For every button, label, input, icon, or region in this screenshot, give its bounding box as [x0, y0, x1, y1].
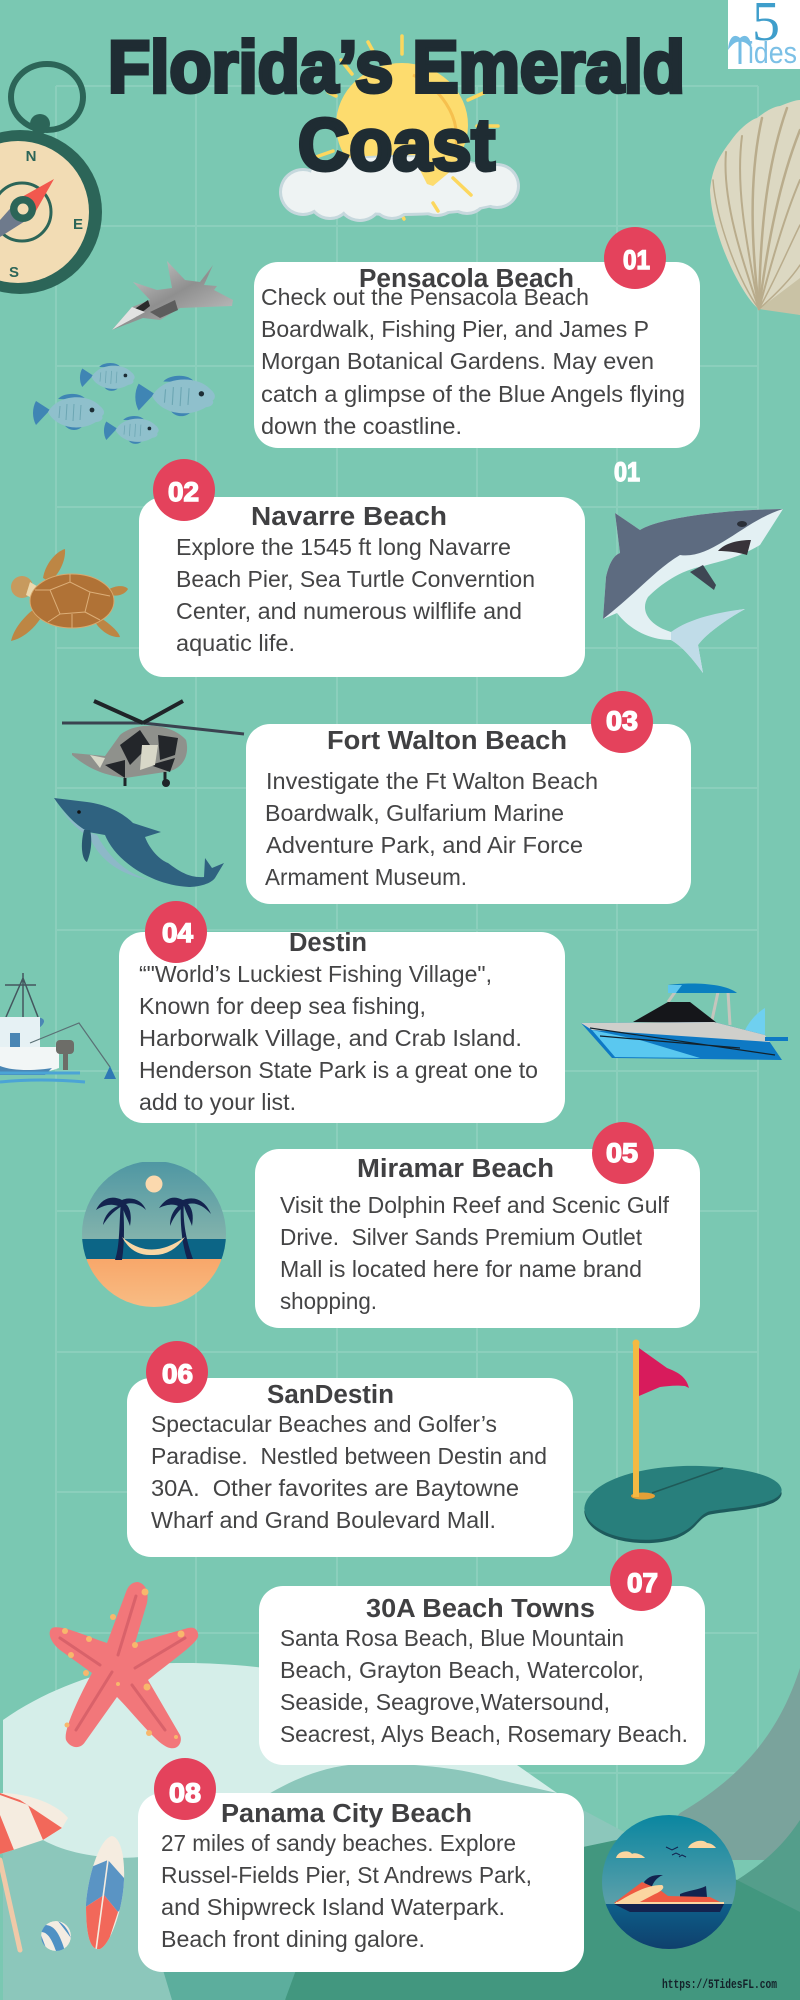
text block: 27 miles of sandy beaches. Explore	[161, 1830, 516, 1856]
badge 08	[154, 1758, 216, 1820]
icon: surfboard	[86, 1836, 124, 1950]
text block: Paradise. Nestled between Destin and	[151, 1443, 547, 1469]
heading: Pensacola Beach	[359, 265, 574, 293]
icon: beach ball	[41, 1921, 71, 1951]
text block: Beach Pier, Sea Turtle Converntion	[176, 566, 535, 592]
panel: Pensacola Beach	[254, 227, 700, 448]
text block: and Shipwreck Island Waterpark.	[161, 1894, 505, 1920]
background grid	[56, 86, 758, 1840]
icon: sea turtle	[11, 549, 128, 641]
text block	[161, 1830, 532, 1952]
text block: aquatic life.	[176, 630, 295, 656]
text block	[261, 284, 685, 439]
badge 04	[145, 901, 207, 963]
badge 03: 03	[606, 706, 638, 736]
title: Florida’s Emerald	[108, 27, 685, 108]
compass icon: E	[73, 216, 83, 233]
compass icon	[0, 64, 102, 294]
heading: Panama City Beach	[221, 1800, 472, 1828]
stray number: 01	[614, 457, 640, 487]
badge 08: 08	[169, 1778, 201, 1808]
badge 05: 05	[606, 1138, 638, 1168]
text block: Beach, Grayton Beach, Watercolor,	[280, 1657, 644, 1683]
text block: Harborwalk Village, and Crab Island.	[139, 1025, 522, 1051]
panel: Fort Walton Beach	[246, 691, 691, 904]
icon: shark	[603, 509, 783, 673]
badge 04: 04	[162, 918, 193, 948]
text block: Seacrest, Alys Beach, Rosemary Beach.	[280, 1721, 688, 1747]
icon: helicopter	[62, 701, 244, 787]
title: Coast	[298, 105, 495, 186]
text block: Center, and numerous wilflife and	[176, 598, 522, 624]
text block: Santa Rosa Beach, Blue Mountain	[280, 1625, 624, 1651]
text block	[265, 768, 598, 890]
panel: Navarre Beach	[139, 459, 585, 677]
icon: golf flag and green	[584, 1340, 782, 1543]
compass icon: S	[9, 264, 19, 281]
heading: SanDestin	[267, 1381, 394, 1409]
text block: add to your list.	[139, 1089, 296, 1115]
text block: Boardwalk, Fishing Pier, and James P	[261, 316, 649, 342]
badge 05	[592, 1122, 654, 1184]
heading: Navarre Beach	[251, 503, 447, 531]
icon: speedboat	[581, 984, 788, 1060]
text block: Seaside, Seagrove,Watersound,	[280, 1689, 610, 1715]
icon: beach umbrella	[0, 1790, 70, 1950]
text block: “"World’s Luckiest Fishing Village",	[139, 961, 492, 987]
text block: Boardwalk, Gulfarium Marine	[265, 800, 564, 826]
text block: Spectacular Beaches and Golfer’s	[151, 1411, 497, 1437]
text block	[151, 1411, 547, 1533]
text block: Mall is located here for name brand	[280, 1256, 642, 1282]
text block	[280, 1192, 670, 1314]
text block: Visit the Dolphin Reef and Scenic Gulf	[280, 1192, 670, 1218]
panel: Destin	[119, 901, 565, 1123]
text block	[139, 961, 538, 1115]
text block: Beach front dining galore.	[161, 1926, 425, 1952]
text block: Check out the Pensacola Beach	[261, 284, 589, 310]
icon: starfish	[50, 1582, 198, 1748]
icon: sun	[313, 36, 498, 219]
heading: Destin	[289, 929, 367, 957]
icon: seashell	[710, 100, 800, 315]
badge 03	[591, 691, 653, 753]
panel: Miramar Beach	[255, 1122, 700, 1328]
text block: Armament Museum.	[265, 864, 467, 890]
icon: fighter jet	[112, 261, 233, 330]
heading: Fort Walton Beach	[327, 727, 567, 755]
text block: 30A. Other favorites are Baytowne	[151, 1475, 519, 1501]
text block: Morgan Botanical Gardens. May even	[261, 348, 654, 374]
icon: palm tree beach scene	[82, 1162, 226, 1309]
badge 07	[610, 1549, 672, 1611]
bottom landscape shapes	[3, 1663, 800, 2000]
text block: Explore the 1545 ft long Navarre	[176, 534, 511, 560]
badge 01	[604, 227, 666, 289]
badge 02	[153, 459, 215, 521]
icon: fishing boat	[0, 973, 116, 1082]
title	[108, 27, 685, 186]
text block	[176, 534, 535, 656]
panel: Panama City Beach	[138, 1758, 584, 1972]
text block: Investigate the Ft Walton Beach	[266, 768, 598, 794]
text block: Known for deep sea fishing,	[139, 993, 426, 1019]
panel: 30A Beach Towns	[259, 1549, 705, 1765]
text block: shopping.	[280, 1288, 377, 1314]
text block	[280, 1625, 688, 1747]
icon: dolphin	[54, 798, 224, 887]
badge 06: 06	[162, 1359, 193, 1389]
icon: cloud	[279, 150, 520, 222]
panel: SanDestin	[127, 1341, 573, 1557]
heading: 30A Beach Towns	[366, 1595, 595, 1623]
text block: Wharf and Grand Boulevard Mall.	[151, 1507, 496, 1533]
badge 07: 07	[627, 1568, 658, 1598]
text block: down the coastline.	[261, 413, 462, 439]
logo: 5 Tides	[728, 0, 800, 70]
text block: Henderson State Park is a great one to	[139, 1057, 538, 1083]
compass icon: N	[26, 148, 36, 165]
badge 02: 02	[168, 477, 199, 507]
icon: jet ski scene	[600, 1815, 740, 1950]
icon: school of fish	[33, 363, 215, 444]
badge 06	[146, 1341, 208, 1403]
text block: catch a glimpse of the Blue Angels flying	[261, 381, 685, 407]
heading: Miramar Beach	[357, 1155, 554, 1183]
text block: Russel-Fields Pier, St Andrews Park,	[161, 1862, 532, 1888]
text block: Adventure Park, and Air Force	[266, 832, 583, 858]
text block: Drive. Silver Sands Premium Outlet	[280, 1224, 643, 1250]
badge 01: 01	[623, 245, 650, 275]
